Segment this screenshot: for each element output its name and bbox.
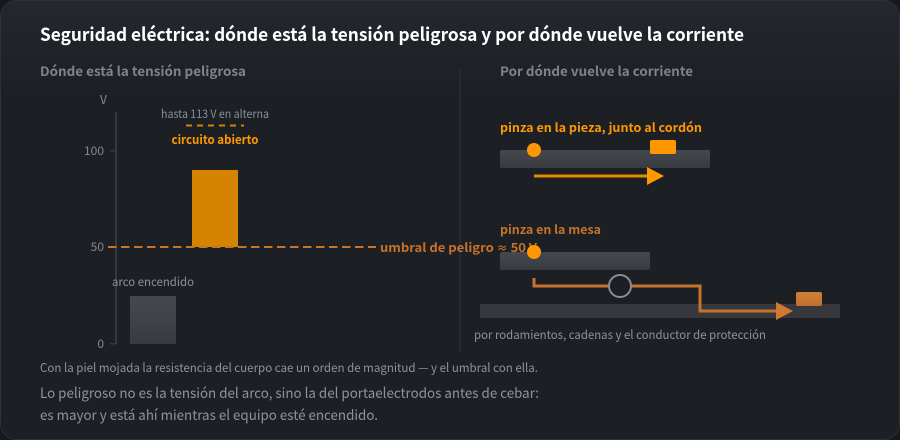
label: pinza en la pieza, junto al cordón xyxy=(500,119,702,136)
heading: right panel: Por dónde vuelve la corriente xyxy=(500,61,693,80)
summary: Lo peligroso no es la tensión del arco, sino la del portaelectrodos antes de cebar: xyxy=(40,383,539,403)
note: Con la piel mojada la resistencia del cuerpo cae un orden de magnitud — y el umbral con ella. xyxy=(40,359,538,376)
arrowhead xyxy=(776,302,793,320)
diagram: clamp on workpiece xyxy=(500,119,710,185)
return path xyxy=(534,278,778,311)
marker: 113 V dashed xyxy=(186,124,244,126)
label: hasta 113 V: hasta 113 V en alterna xyxy=(161,106,269,122)
title: Seguridad eléctrica: dónde está la tensión peligrosa y por dónde vuelve la corriente xyxy=(40,21,744,47)
bearing xyxy=(609,275,631,297)
heading: left panel: Dónde está la tensión peligrosa xyxy=(40,61,246,80)
bar: circuito abierto xyxy=(192,170,238,247)
panel divider xyxy=(459,68,461,352)
label: arco encendido: arco encendido xyxy=(112,273,194,290)
workpiece xyxy=(500,150,710,168)
electrode dot xyxy=(527,245,541,259)
workpiece xyxy=(500,252,650,270)
y axis xyxy=(84,91,117,352)
threshold label: umbral de peligro ≈ 50 V xyxy=(380,239,538,256)
caption: por rodamientos, cadenas y el conductor de protección xyxy=(474,326,766,343)
diagram: clamp on table xyxy=(474,221,840,343)
y axis: 50 xyxy=(91,238,104,255)
label: circuito abierto: circuito abierto xyxy=(172,131,258,148)
y axis: 100 xyxy=(84,142,104,159)
y axis: 0 xyxy=(97,335,104,352)
threshold line xyxy=(108,246,376,248)
bar: arco encendido xyxy=(130,296,176,344)
y axis: V xyxy=(100,91,107,108)
electrode dot xyxy=(527,143,541,157)
clamp xyxy=(650,140,676,154)
clamp xyxy=(796,292,822,306)
chart: voltage bars xyxy=(84,91,538,352)
arrow xyxy=(534,167,664,185)
table xyxy=(480,304,840,318)
summary xyxy=(40,383,539,425)
label: pinza en la mesa xyxy=(500,221,601,238)
summary: es mayor y está ahí mientras el equipo esté encendido. xyxy=(40,405,378,425)
